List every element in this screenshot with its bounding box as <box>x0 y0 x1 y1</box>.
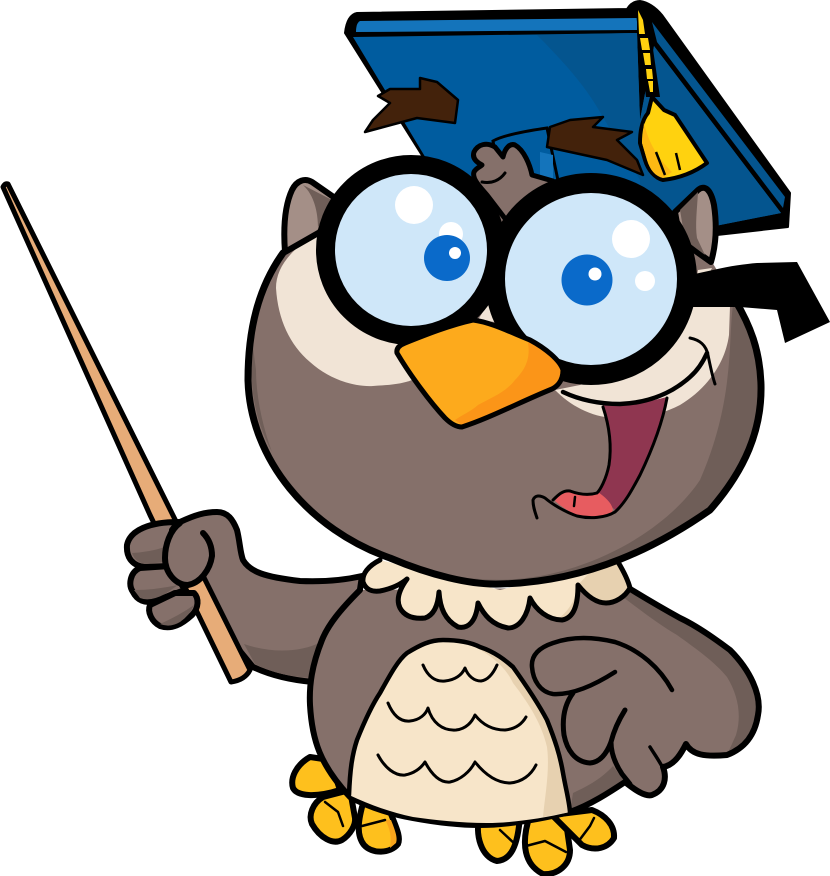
left eyebrow <box>365 78 458 132</box>
belly <box>349 640 570 823</box>
glasses temple arm <box>690 262 830 343</box>
left lens <box>326 164 496 336</box>
cream face patches <box>276 230 730 418</box>
right lens <box>495 183 687 375</box>
feathered collar <box>363 560 630 628</box>
arm holding pointer <box>170 512 362 690</box>
hand fingers <box>127 522 212 627</box>
wing lines <box>532 638 672 784</box>
graduation cap <box>345 1 790 250</box>
pointer stick <box>3 184 250 682</box>
tassel <box>635 5 707 180</box>
feet <box>292 757 614 874</box>
right eyebrow <box>547 117 643 175</box>
head tuft <box>473 144 553 225</box>
right ear <box>675 188 716 262</box>
open mouth <box>533 338 715 518</box>
body <box>310 587 759 825</box>
head <box>248 175 761 584</box>
left ear <box>284 180 335 252</box>
beak <box>397 320 563 427</box>
